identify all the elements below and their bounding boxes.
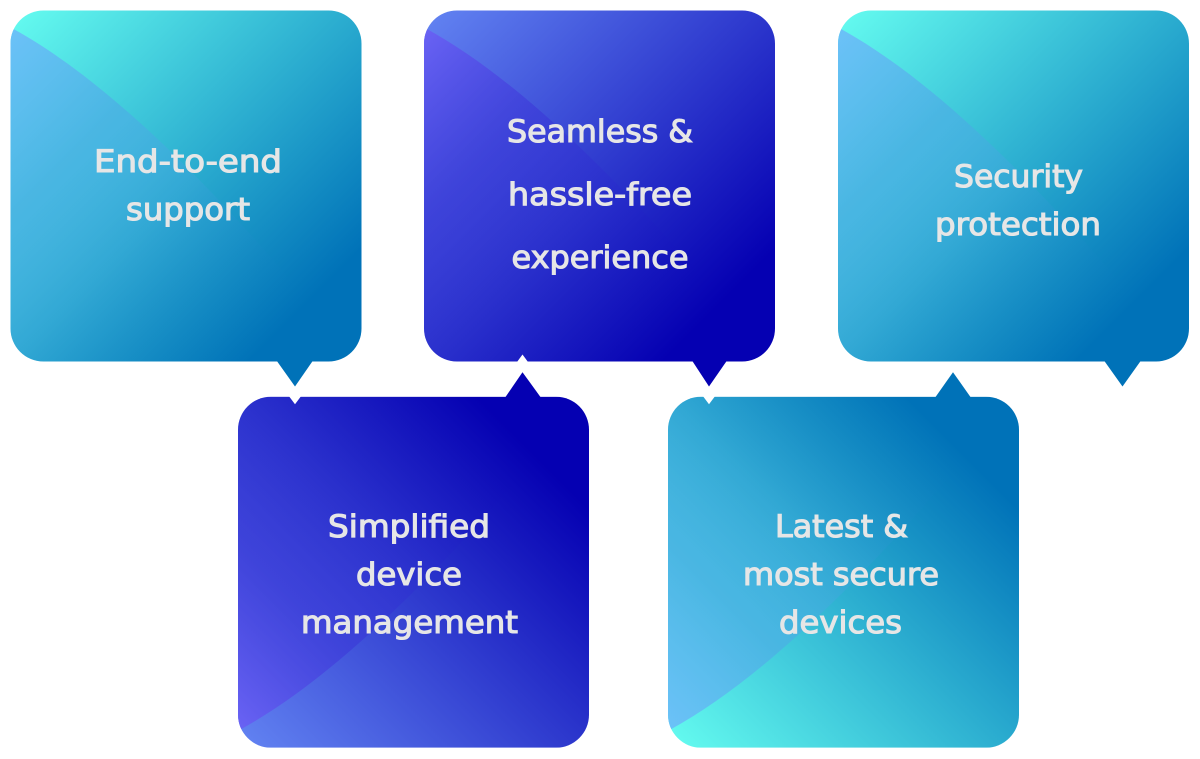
panel: security protection [838,10,1189,386]
label [507,114,693,276]
label: hassle-free [508,177,692,213]
label [743,509,939,641]
label [935,159,1101,243]
label: device [356,557,462,593]
label: End-to-end [94,144,282,180]
label [301,509,518,641]
label: Security [954,159,1083,195]
label: experience [512,240,688,276]
label: Latest & [775,509,908,545]
speech bubble shape [424,10,775,386]
label: management [301,605,518,641]
speech bubble shape [238,372,589,748]
panel: end-to-end support [10,10,362,386]
label: devices [779,605,902,641]
panel: latest and most secure devices [668,372,1019,748]
label: Simplified [328,509,490,545]
label: Seamless & [507,114,693,150]
panel: simplified device management [238,372,589,748]
panel: seamless and hassle-free experience [424,10,775,386]
speech bubble shape [10,10,362,386]
label: protection [935,207,1101,243]
label [94,144,282,228]
speech bubble shape [668,372,1019,748]
label: support [126,192,250,228]
label: most secure [743,557,939,593]
speech bubble shape [838,10,1189,386]
